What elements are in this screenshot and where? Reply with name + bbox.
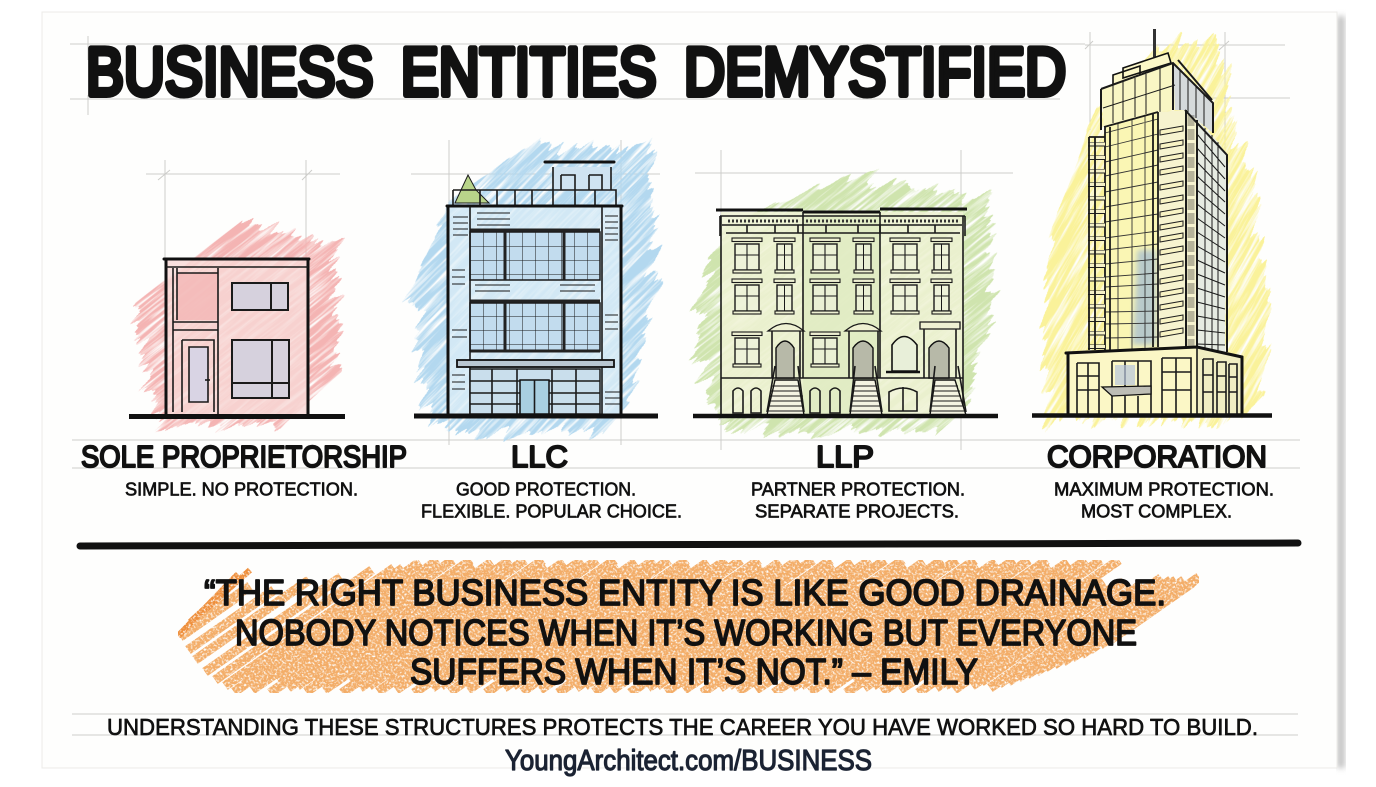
- label: corporation: [1047, 439, 1274, 522]
- window rows: [732, 238, 952, 367]
- red crayon shading: [36, 121, 439, 524]
- label: LLP: [751, 439, 965, 522]
- green crayon shading: [573, 33, 1115, 574]
- ground line: [1032, 413, 1272, 418]
- panel: corporation tower: [878, 0, 1376, 520]
- label: sole proprietorship: SIMPLE. NO PROTECTION.: [125, 478, 358, 500]
- upper tier: [1101, 60, 1213, 133]
- balconies: [1160, 126, 1183, 337]
- right faces: [1158, 110, 1227, 352]
- front glazing: [1104, 112, 1158, 350]
- orange crayon shading: [178, 560, 1199, 693]
- quote text: [204, 572, 1166, 692]
- ground line: [129, 414, 345, 419]
- label: LLC: GOOD PROTECTION.: [456, 478, 636, 500]
- yellow crayon shading: [878, 0, 1376, 520]
- quote text: “THE RIGHT BUSINESS ENTITY IS LIKE GOOD DRAINAGE.: [204, 572, 1166, 613]
- podium: [1066, 347, 1242, 415]
- panel: LLC building: [270, 24, 798, 552]
- label: sole proprietorship: [81, 439, 407, 500]
- closing statement: UNDERSTANDING THESE STRUCTURES PROTECTS THE CAREER YOU HAVE WORKED SO HARD TO BUILD.: [107, 714, 1258, 740]
- label: LLC: LLC: [511, 439, 568, 474]
- left balconies: [1088, 137, 1105, 350]
- quote text: SUFFERS WHEN IT’S NOT.” – EMILY: [410, 651, 978, 692]
- label: LLP: SEPARATE PROJECTS.: [755, 500, 959, 522]
- label: corporation: MOST COMPLEX.: [1081, 500, 1232, 522]
- building elevation: [164, 259, 309, 415]
- rowhouse elevation: [716, 209, 967, 415]
- blue crayon shading: [270, 24, 798, 552]
- building elevation: [447, 162, 622, 415]
- website url: YoungArchitect.com/BUSINESS: [505, 745, 872, 777]
- panel: LLP building: [573, 33, 1115, 574]
- doors and stoops: [733, 322, 966, 415]
- panel: sole proprietorship building: [36, 121, 439, 524]
- label: LLP: LLP: [816, 439, 874, 474]
- guide lines: [70, 32, 1300, 735]
- label: LLC: [421, 439, 682, 522]
- label: corporation: MAXIMUM PROTECTION.: [1054, 478, 1274, 500]
- label: corporation: CORPORATION: [1047, 439, 1267, 474]
- title: BUSINESS ENTITIES DEMYSTIFIED: [86, 34, 1066, 110]
- label: LLP: PARTNER PROTECTION.: [751, 478, 965, 500]
- ground line: [693, 414, 998, 418]
- tower drawing: [1066, 29, 1242, 415]
- ground line: [414, 414, 658, 418]
- quote text: NOBODY NOTICES WHEN IT’S WORKING BUT EVERYONE: [235, 612, 1137, 653]
- quote callout: [178, 560, 1199, 693]
- label: sole proprietorship: SOLE PROPRIETORSHIP: [81, 439, 407, 474]
- label: LLC: FLEXIBLE. POPULAR CHOICE.: [421, 500, 682, 522]
